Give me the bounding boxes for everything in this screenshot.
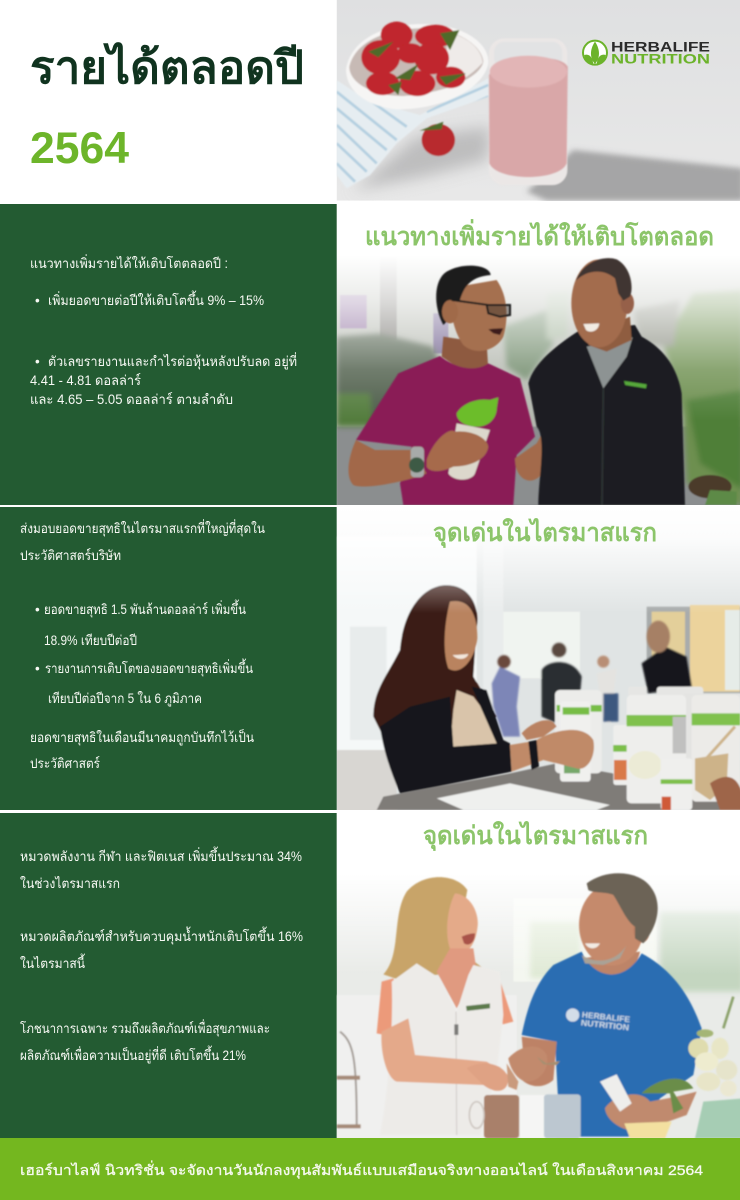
photo: strawberries and shake <box>337 0 740 201</box>
shirt logo <box>566 1008 631 1032</box>
background room <box>337 537 740 813</box>
text: earnings line 3: และ 4.65 – 5.05 ดอลล่าร์ ตามลำดับ <box>30 391 233 407</box>
paper <box>437 783 610 810</box>
text: earnings line 2: 4.41 - 4.81 ดอลล่าร์ <box>30 372 141 388</box>
icon: single strawberry <box>419 122 455 156</box>
text: regions line 2: เทียบปีต่อปีจาก 5 ใน 6 ภูมิภาค <box>48 690 202 707</box>
woman's hands and wristband <box>510 720 594 772</box>
text: weight category line 2: ในไตรมาสนี้ <box>20 953 85 971</box>
text: guidance intro: แนวทางเพิ่มรายได้ให้เติบโตตลอดปี : <box>30 254 228 271</box>
shirt logo: HERBALIFE <box>581 1009 631 1024</box>
photo: woman with product containers <box>337 507 740 813</box>
panel: first quarter sales text <box>0 507 337 810</box>
text: net sales line 2: 18.9% เทียบปีต่อปี <box>44 633 137 648</box>
heading: guidance: แนวทางเพิ่มรายได้ให้เติบโตตลอด <box>365 219 714 251</box>
text: earnings line 1: ตัวเลขรายงานและกำไรต่อหุ้นหลังปรับลด อยู่ที่ <box>48 352 297 370</box>
text: targeted nutrition line 2: ผลิตภัณฑ์เพื่อความเป็นอยู่ที่ดี เติบโตขึ้น 21% <box>20 1045 246 1064</box>
background people <box>492 621 692 737</box>
man in black jacket <box>528 258 685 505</box>
text: first quarter lead line 1: ส่งมอบยอดขายสุทธิในไตรมาสแรกที่ใหญ่ที่สุดใน <box>20 519 265 537</box>
footer banner <box>0 1138 740 1200</box>
heading: first quarter highlights second: จุดเด่นในไตรมาสแรก <box>423 820 648 852</box>
photo: two men with shaker <box>337 204 740 507</box>
title: รายได้ตลอดปี <box>30 41 304 93</box>
text: targeted nutrition line 1: โภชนาการเฉพาะ รวมถึงผลิตภัณฑ์เพื่อสุขภาพและ <box>20 1019 270 1037</box>
vest logo <box>466 1003 490 1011</box>
logo: Herbalife Nutrition <box>583 40 710 67</box>
man in maroon shirt <box>348 266 548 505</box>
text: bullet earnings: • <box>35 354 40 369</box>
year: 2564 <box>30 124 129 173</box>
text: energy category line 1: หมวดพลังงาน กีฬา และฟิตเนส เพิ่มขึ้นประมาณ 34% <box>20 846 302 864</box>
heading: first quarter highlights: จุดเด่นในไตรมาสแรก <box>433 517 657 549</box>
vase and flowers <box>642 997 740 1138</box>
photo: couple in kitchen <box>337 813 740 1138</box>
logo: Herbalife Nutrition: HERBALIFE <box>611 40 710 55</box>
text: March record line 2: ประวัติศาสตร์ <box>30 755 100 771</box>
title block <box>30 41 304 173</box>
woman <box>377 877 518 1135</box>
counter <box>377 763 740 810</box>
text: footer announcement: เฮอร์บาไลฟ์ นิวทริชั่น จะจัดงานวันนักลงทุนสัมพันธ์แบบเสมือนจริงทางออนไลน์ ในเดือนสิงหาคม 2564 <box>20 1161 703 1179</box>
icon: strawberries in bowl <box>361 22 466 96</box>
text: net sales line 1: ยอดขายสุทธิ 1.5 พันล้านดอลล่าร์ เพิ่มขึ้น <box>44 599 246 618</box>
panel: category growth text <box>0 813 337 1138</box>
shirt logo: NUTRITION <box>580 1017 630 1032</box>
text: bullet sales growth: • <box>35 293 40 308</box>
logo: Herbalife Nutrition: NUTRITION <box>611 52 710 67</box>
glasses on counter <box>469 1094 672 1138</box>
text: bullet regions: • <box>35 661 40 676</box>
text: first quarter lead line 2: ประวัติศาสตร์บริษัท <box>20 547 121 563</box>
background kitchen <box>337 898 740 1138</box>
icon: bowl <box>346 24 488 109</box>
text: regions line 1: รายงานการเติบโตของยอดขายสุทธิเพิ่มขึ้น <box>45 658 253 677</box>
jacket logo <box>624 381 647 388</box>
shaker bottle <box>448 397 498 480</box>
panel: full-year guidance text <box>0 204 337 505</box>
product containers <box>555 687 740 810</box>
text: sales growth: เพิ่มยอดขายต่อปีให้เติบโตขึ้น 9% – 15% <box>48 290 264 308</box>
text: weight category line 1: หมวดผลิตภัณฑ์สำหรับควบคุมน้ำหนักเติบโตขึ้น 16% <box>20 926 303 945</box>
woman <box>373 585 512 793</box>
text: March record line 1: ยอดขายสุทธิในเดือนมีนาคมถูกบันทึกไว้เป็น <box>30 728 254 746</box>
text: energy category line 2: ในช่วงไตรมาสแรก <box>20 875 120 891</box>
wristwatch <box>409 447 424 477</box>
man <box>508 873 702 1137</box>
icon: shake glass <box>489 38 568 185</box>
icon: striped napkin <box>337 75 488 188</box>
text: bullet net sales: • <box>35 602 40 617</box>
